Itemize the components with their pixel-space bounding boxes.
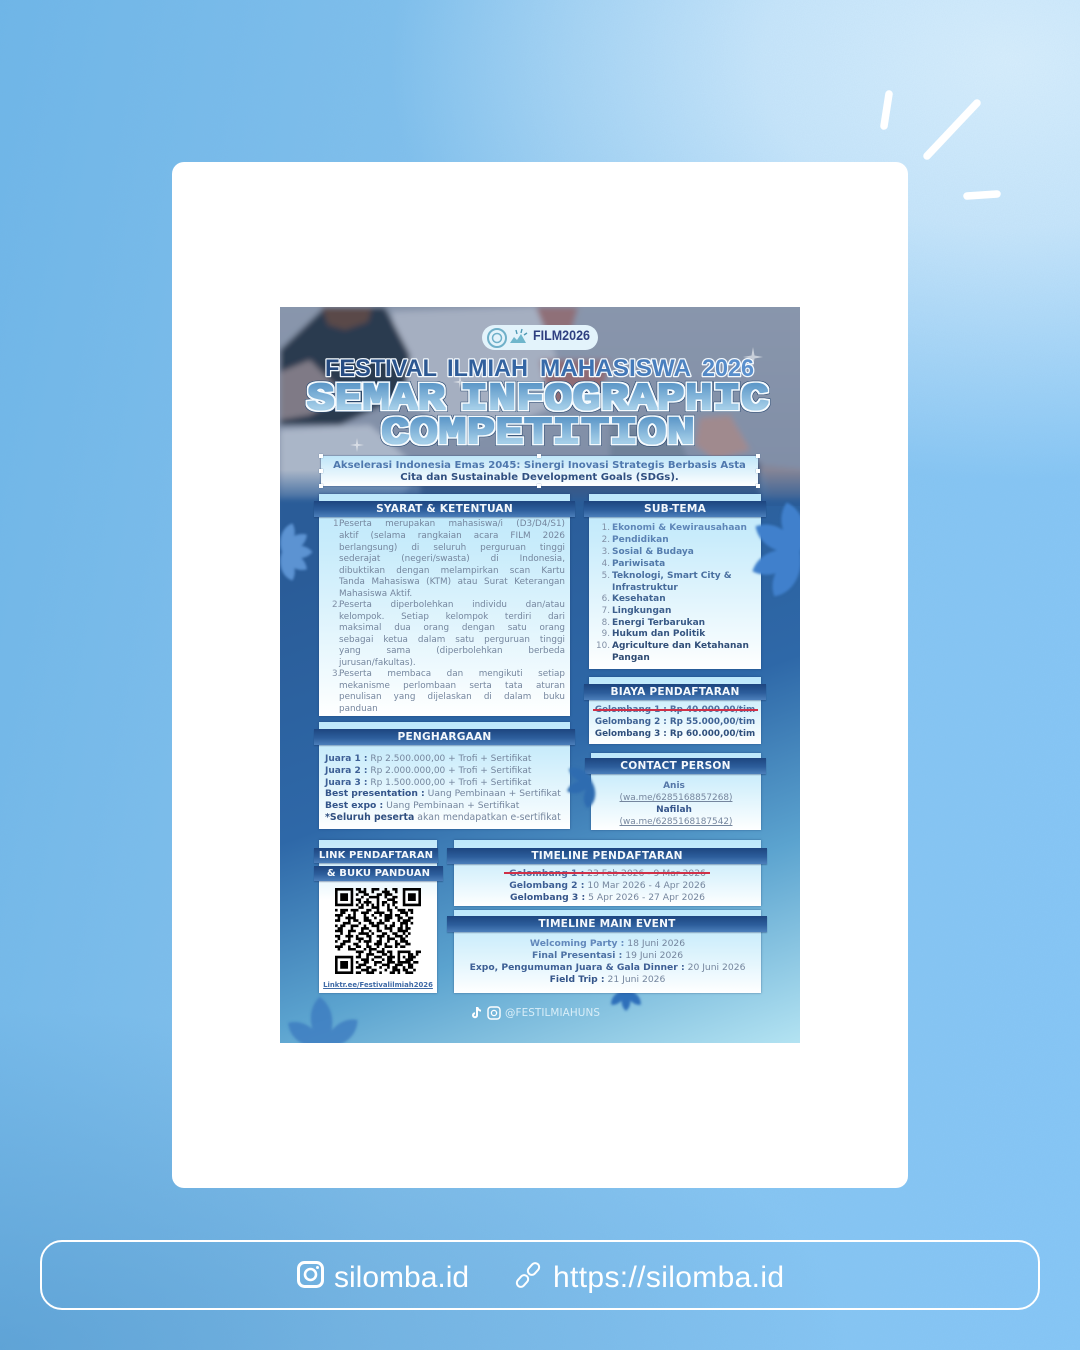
heading: sub-tema [584, 501, 766, 517]
flowers over panels [566, 502, 800, 808]
heading: penghargaan: PENGHARGAAN [398, 731, 491, 743]
text: theme list: 10. [596, 641, 610, 651]
heading: link pendaftaran: LINK PENDAFTARAN [319, 850, 433, 861]
text: event dates: Final Presentasi : 19 Juni 2026 [532, 950, 683, 961]
text: fees [593, 705, 758, 739]
social handles [472, 1006, 600, 1020]
heading: sub-tema: SUB-TEMA [644, 503, 706, 515]
heading: penghargaan [314, 729, 575, 745]
text: theme list: 1. [602, 523, 610, 533]
icon: link [516, 1262, 540, 1288]
poster background photo and flowers [280, 307, 800, 1043]
text: rules list: yang sama (diperbolehkan berbeda [339, 646, 565, 656]
logo pill [482, 325, 598, 350]
text: rules list: 2. [332, 600, 340, 610]
icon: spark lines [880, 90, 1001, 200]
text: event dates: Field Trip : 21 Juni 2026 [550, 974, 665, 985]
text: theme list: 6. [602, 594, 610, 604]
text: rules list: mekanisme perlombaan serta tata aturan [339, 681, 565, 691]
text: prize list: Juara 3 : Rp 1.500.000,00 + Trofi + Sertifikat [325, 778, 531, 788]
panel: link pendaftaran and QR [314, 839, 444, 994]
panel: timeline main event [446, 909, 768, 994]
text: theme list: 9. [602, 629, 610, 639]
panel: white card [172, 162, 908, 1188]
text: contacts: (wa.me/6285168187542) [620, 817, 732, 827]
text: theme list: 5. [602, 571, 610, 581]
text: rules list: penulisan yang dijelaskan di dalam buku [339, 692, 565, 702]
text: registration dates: Gelombang 1 : 23 Feb 2026 - 9 Mar 2026 [509, 868, 706, 879]
panel: biaya pendaftaran [584, 676, 766, 745]
text: theme list: Pendidikan [612, 535, 669, 545]
text: theme list: Lingkungan [612, 606, 671, 616]
link text: Linktr.ee/Festivalilmiah2026 [323, 981, 433, 989]
text: contacts: Nafilah [656, 805, 692, 815]
text: rules list: 1. [333, 519, 341, 529]
text: rules list: jurusan/fakultas). [339, 658, 416, 668]
icon: instagram [297, 1261, 324, 1288]
text: theme list: 7. [602, 606, 610, 616]
heading: semar infographic: SEMAR [307, 378, 445, 421]
text: rules list: 3. [332, 669, 340, 679]
panel: syarat & ketentuan [314, 493, 575, 717]
text: theme list: Sosial & Budaya [612, 547, 694, 557]
text: theme list: Ekonomi & Kewirausahaan [612, 523, 747, 533]
logo pill: FILM2026 [533, 328, 590, 343]
text: url: https://silomba.id [553, 1261, 784, 1294]
text: rules list: kelompok. Setiap kelompok terdiri dari [339, 612, 565, 622]
heading: festival ilmiah mahasiswa: 2026 [702, 355, 754, 382]
heading: link pendaftaran [314, 848, 438, 863]
panel: timeline pendaftaran [446, 839, 768, 908]
heading: festival ilmiah mahasiswa [325, 355, 754, 382]
text: theme list: Energi Terbarukan [612, 618, 705, 628]
text: rules list: Peserta diperbolehkan individu dan/atau [339, 600, 565, 610]
heading: festival ilmiah mahasiswa: FESTIVAL [325, 355, 437, 382]
heading: timeline pendaftaran: TIMELINE PENDAFTARAN [531, 850, 683, 862]
text: theme list: 4. [602, 559, 610, 569]
poster [280, 307, 800, 1043]
subtitle box [318, 454, 760, 488]
heading: semar infographic: INFOGRAPHIC [460, 378, 769, 421]
subtitle box: Akselerasi Indonesia Emas 2045: Sinergi Inovasi Strategis Berbasis Asta [333, 460, 746, 471]
heading: festival ilmiah mahasiswa: MAHASISWA [540, 355, 691, 382]
text: prize list: Best presentation : Uang Pembinaan + Sertifikat [325, 788, 561, 799]
panel: contact person [584, 752, 766, 831]
text: rules list: sederajat (negeri/swasta) di Indonesia, [339, 554, 565, 564]
heading: syarat [314, 501, 575, 517]
text: rules list: Mahasiswa Aktif. [339, 589, 412, 599]
handle text: @FESTILMIAHUNS [505, 1007, 600, 1019]
text: prize list: Juara 2 : Rp 2.000.000,00 + Trofi + Sertifikat [325, 766, 531, 776]
text: theme list: 8. [602, 618, 610, 628]
bottom background shade [0, 1000, 1080, 1350]
text: contacts: Anis [663, 781, 685, 791]
text: rules list: sebagai ketua dalam satu perguruan tinggi [339, 635, 565, 645]
text: rules list: dibuktikan dengan melampirkan scan Kartu [339, 566, 565, 576]
text: theme list [596, 523, 749, 663]
text: rules list [332, 519, 565, 714]
text: prize list [324, 754, 561, 823]
text: theme list: Hukum dan Politik [612, 629, 705, 639]
text: rules list: Peserta merupakan mahasiswa/i (D3/D4/S1) [339, 519, 565, 529]
heading: competition: COMPETITION [381, 412, 695, 455]
text: theme list: Infrastruktur [612, 583, 678, 593]
heading: contact [585, 758, 766, 774]
panel: sub-tema [584, 494, 766, 670]
text: event dates [470, 938, 745, 985]
text: event dates: Expo, Pengumuman Juara & Gala Dinner : 20 Juni 2026 [470, 962, 745, 973]
heading: timeline main event: TIMELINE MAIN EVENT [538, 918, 676, 930]
text: rules list: aktif (selama rangkaian acara FILM 2026 [339, 531, 565, 541]
text: theme list: Pangan [612, 653, 650, 663]
text: contacts [620, 781, 732, 827]
text: fees: Gelombang 3 : Rp 60.000,00/tim [595, 729, 755, 739]
text: rules list: Tanda Mahasiswa (KTM) atau Surat Keterangan [339, 577, 565, 587]
text: silomba.id: silomba.id [334, 1261, 469, 1294]
icon: tiktok [472, 1007, 482, 1018]
icon: instagram [487, 1006, 501, 1020]
heading: syarat: SYARAT & KETENTUAN [376, 503, 513, 515]
text: theme list: 2. [602, 535, 610, 545]
text: prize list: Best expo : Uang Pembinaan + Sertifikat [325, 800, 519, 811]
text: rules list: berlangsung) di seluruh perguruan tinggi [339, 543, 565, 553]
text: prize list: Juara 1 : Rp 2.500.000,00 + Trofi + Sertifikat [325, 754, 531, 764]
heading: timeline pendaftaran [447, 848, 767, 864]
heading: festival ilmiah mahasiswa: ILMIAH [447, 355, 528, 382]
heading: timeline main event [447, 916, 767, 932]
text: registration dates: Gelombang 2 : 10 Mar 2026 - 4 Apr 2026 [509, 880, 706, 891]
text: fees: Gelombang 2 : Rp 55.000,00/tim [595, 717, 755, 727]
text: theme list: 3. [602, 547, 610, 557]
text: registration dates [504, 868, 710, 903]
text: rules list: maksimal dua orang dengan satu orang [339, 623, 565, 633]
text: fees: Gelombang 1 : Rp 40.000,00/tim [595, 705, 755, 715]
text: prize list: *Seluruh peserta akan mendapatkan e-sertifikat [325, 812, 561, 823]
text: contacts: (wa.me/6285168857268) [620, 793, 732, 803]
QR code [335, 888, 421, 974]
text: rules list: panduan [339, 704, 378, 714]
text: theme list: Teknologi, Smart City & [612, 571, 732, 581]
text: event dates: Welcoming Party : 18 Juni 2026 [530, 938, 685, 949]
heading: biaya: BIAYA PENDAFTARAN [610, 686, 740, 698]
heading: semar infographic [307, 378, 769, 421]
panel: penghargaan [314, 721, 576, 830]
title block [304, 325, 771, 455]
footer bar [40, 1240, 1040, 1310]
text: registration dates: Gelombang 3 : 5 Apr 2026 - 27 Apr 2026 [510, 892, 705, 903]
text: theme list: Pariwisata [612, 559, 665, 569]
subtitle box: Cita dan Sustainable Development Goals (SDGs). [400, 472, 679, 483]
heading: buku panduan [314, 866, 443, 881]
heading: contact: CONTACT PERSON [620, 760, 731, 772]
sparkles [350, 347, 763, 452]
text: theme list: Kesehatan [612, 594, 666, 604]
text: theme list: Agriculture dan Ketahanan [612, 641, 749, 651]
text: rules list: Peserta membaca dan mengikuti setiap [339, 669, 565, 679]
heading: biaya [584, 684, 766, 700]
heading: buku panduan: & BUKU PANDUAN [327, 868, 430, 879]
